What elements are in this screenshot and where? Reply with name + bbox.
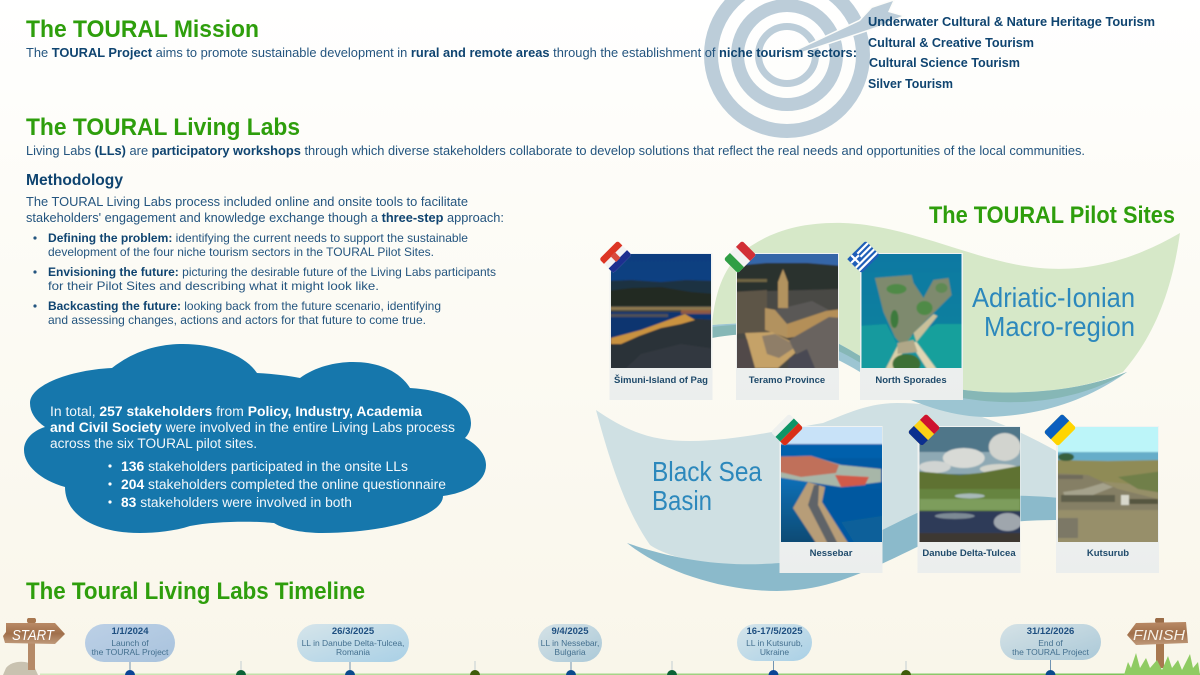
icon: FINISH sign: FINISH	[1133, 627, 1185, 644]
milestone: launch: the TOURAL Project	[92, 647, 169, 657]
milestone: launch: Launch of	[111, 638, 149, 648]
milestone: Kutsurub: 16-17/5/2025	[746, 626, 803, 637]
shape: black sea wave	[596, 403, 1060, 565]
milestone: Nessebar: Bulgaria	[554, 647, 586, 657]
list: three steps: Defining the problem: identifying the current needs to support the sustainable	[48, 231, 468, 245]
flag: Greece	[847, 241, 880, 273]
panel: card Nessebar	[776, 422, 887, 573]
icon: START sign: START	[12, 627, 56, 644]
callout: stakeholder cloud: 204 stakeholders completed the online questionnaire	[121, 477, 446, 492]
list: three steps: and assessing changes, actions and actors for that future to come true.	[48, 313, 426, 327]
list: three steps: for their Pilot Sites and describing what it might look like.	[48, 279, 379, 293]
label: Adriatic-Ionian Macro-region: Adriatic-Ionian	[972, 282, 1135, 313]
icon: target with arrow	[711, 0, 902, 131]
title: timeline: The Toural Living Labs Timeline	[26, 578, 365, 605]
title: living labs: The TOURAL Living Labs	[26, 114, 300, 141]
milestone: end: 31/12/2026	[1027, 626, 1074, 637]
milestone: Danube Delta-Tulcea: Romania	[336, 647, 370, 657]
panel: card Šimuni-Island of Pag	[606, 249, 716, 400]
shape: adriatic lower band light	[712, 323, 1127, 417]
label: Black Sea Basin: Basin	[652, 485, 712, 516]
text: methodology intro: stakeholders' engagement and knowledge exchange though a three-step approach:	[26, 210, 504, 225]
flag: Romania	[908, 414, 940, 446]
list: niche tourism sectors: Cultural Science Tourism	[869, 55, 1020, 70]
milestone: launch	[85, 624, 175, 662]
list: three steps: development of the four niche tourism sectors in the TOURAL Pilot Sites.	[48, 245, 434, 259]
icon: START sign	[3, 618, 65, 675]
callout: stakeholder cloud: across the six TOURAL pilot sites.	[50, 436, 257, 451]
label: Black Sea Basin	[652, 456, 762, 516]
panel: card Danube Delta-Tulcea: Danube Delta-Tulcea	[922, 548, 1016, 559]
text: methodology intro	[26, 194, 504, 225]
milestone: launch: 1/1/2024	[112, 626, 149, 637]
chart: timeline	[40, 624, 1200, 675]
flag: Italy	[724, 241, 756, 273]
milestone: Danube Delta-Tulcea: 26/3/2025	[332, 626, 375, 637]
milestone: Kutsurub: Ukraine	[760, 647, 789, 657]
flag: Croatia	[599, 241, 632, 273]
list: three steps: Envisioning the future: picturing the desirable future of the Living Labs participants	[48, 265, 496, 279]
callout: stakeholder cloud: 83 stakeholders were involved in both	[121, 495, 352, 510]
heading: methodology: Methodology	[26, 172, 123, 189]
flag: Ukraine	[1044, 414, 1076, 446]
label: Adriatic-Ionian Macro-region	[972, 282, 1135, 342]
callout: stakeholder cloud: and Civil Society were involved in the entire Living Labs process	[50, 420, 455, 435]
panel: card Danube Delta-Tulcea	[915, 422, 1025, 573]
milestone: Kutsurub: LL in Kutsurub,	[746, 638, 803, 648]
list: niche tourism sectors: Cultural & Creative Tourism	[868, 35, 1034, 50]
shape: black sea lower band	[627, 496, 1060, 591]
panel: card Nessebar: Nessebar	[810, 548, 853, 559]
list: niche tourism sectors: Underwater Cultural & Nature Heritage Tourism	[868, 14, 1155, 29]
milestone: Nessebar	[538, 624, 602, 662]
label: Black Sea Basin: Black Sea	[652, 456, 762, 487]
panel: card Kutsurub: Kutsurub	[1087, 548, 1129, 559]
text: living labs definition: Living Labs (LLs) are participatory workshops through which diverse stakeholders collaborate to develop solutions that reflect the real needs and opportunities of the local communities.	[26, 143, 1085, 158]
callout: stakeholder cloud: In total, 257 stakeholders from Policy, Industry, Academia	[50, 404, 422, 419]
shape: adriatic lower band teal	[712, 325, 1127, 402]
text: methodology intro: The TOURAL Living Labs process included online and onsite tools to facilitate	[26, 194, 468, 209]
list: niche tourism sectors	[868, 14, 1155, 91]
icon: FINISH sign	[1124, 618, 1200, 675]
panel: card Kutsurub	[1053, 422, 1163, 573]
milestone: Danube Delta-Tulcea: LL in Danube Delta-Tulcea,	[302, 638, 404, 648]
list: niche tourism sectors: Silver Tourism	[868, 76, 953, 91]
milestone: end	[1000, 624, 1101, 660]
panel: card Teramo Province: Teramo Province	[749, 375, 825, 386]
label: Adriatic-Ionian Macro-region: Macro-region	[984, 311, 1135, 342]
milestone: Nessebar: 9/4/2025	[552, 626, 589, 637]
list: three steps: Backcasting the future: looking back from the future scenario, identifying	[48, 299, 441, 313]
milestone: end: End of	[1038, 638, 1063, 648]
milestone: Danube Delta-Tulcea	[297, 624, 409, 662]
title: mission: The TOURAL Mission	[26, 16, 259, 43]
text: mission statement: The TOURAL Project aims to promote sustainable development in rural and remote areas through the establishment of niche tourism sectors:	[26, 45, 857, 60]
panel: card North Sporades	[856, 249, 966, 400]
shape: adriatic-ionian wave	[712, 223, 1180, 393]
list: three steps	[33, 231, 496, 327]
callout: stakeholder cloud: 136 stakeholders participated in the onsite LLs	[121, 459, 408, 474]
milestone: Nessebar: LL in Nessebar,	[541, 638, 599, 648]
panel: card North Sporades: North Sporades	[875, 375, 947, 386]
callout: stakeholder cloud	[24, 344, 486, 533]
title: pilot sites: The TOURAL Pilot Sites	[929, 202, 1175, 229]
milestone: end: the TOURAL Project	[1012, 647, 1090, 657]
flag: Bulgaria	[771, 414, 803, 446]
panel: card Šimuni-Island of Pag: Šimuni-Island of Pag	[614, 374, 708, 386]
milestone: Kutsurub	[737, 624, 812, 661]
panel: card Teramo Province	[732, 249, 843, 400]
